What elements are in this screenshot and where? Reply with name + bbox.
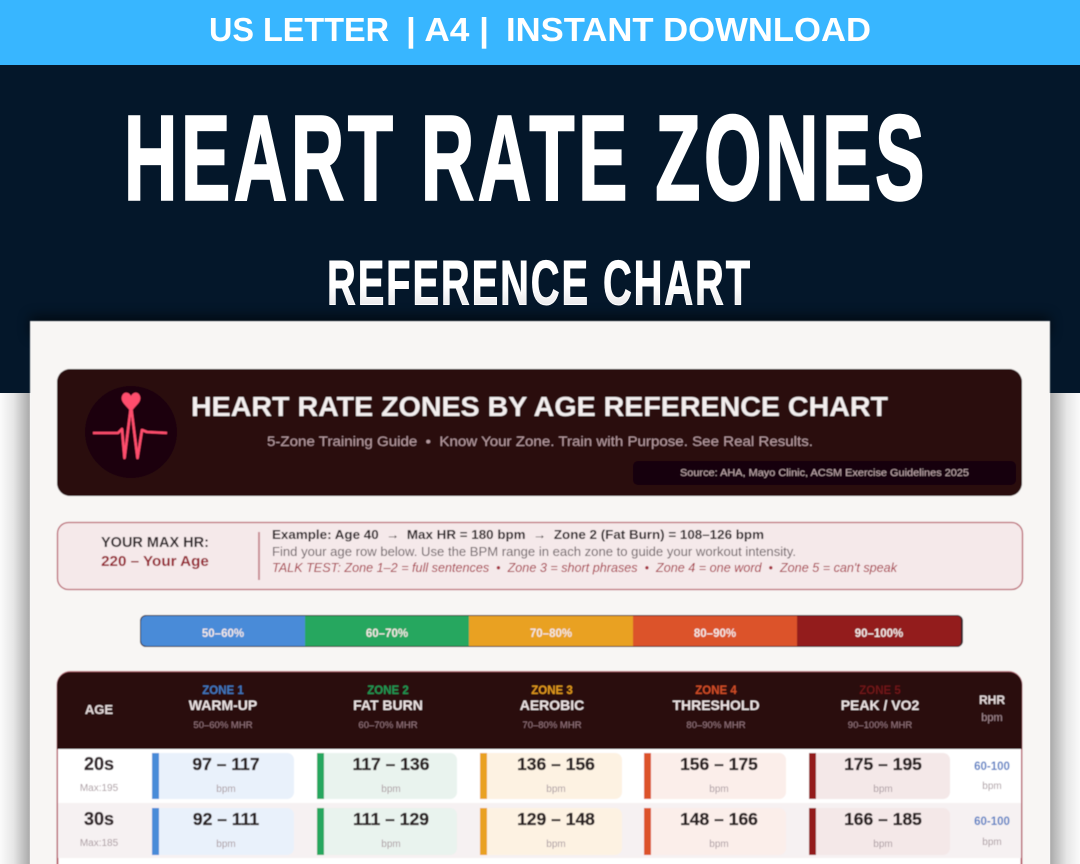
table row: 30s: 111 – 129 <box>353 809 429 829</box>
table row: 30s <box>58 803 1021 858</box>
table row: 20s <box>58 749 1021 803</box>
table row: 30s: 30s <box>84 809 114 829</box>
zone table <box>57 672 1022 864</box>
table row: 20s: Max:195 <box>80 783 119 794</box>
table row: 20s: bpm <box>546 784 566 795</box>
table header row: 50–60% MHR <box>193 720 253 731</box>
table row: 20s: bpm <box>381 784 401 795</box>
table row: 20s: 117 – 136 <box>353 754 430 774</box>
table row: 30s: bpm <box>216 839 236 850</box>
table header row: 90–100% MHR <box>848 720 912 731</box>
panel: max heart rate formula <box>58 522 1022 590</box>
table row: 20s: bpm <box>873 784 893 795</box>
zone intensity bar: 70–80% <box>530 628 572 640</box>
source pill: Source: AHA, Mayo Clinic, ACSM Exercise Guidelines 2025 <box>680 467 969 479</box>
table header row: AEROBIC <box>520 697 584 713</box>
table header row: ZONE 5 <box>859 685 901 697</box>
zone intensity bar <box>140 615 963 647</box>
icon: heart with ECG pulse <box>85 386 177 478</box>
table row: 30s: 129 – 148 <box>517 809 595 829</box>
document card <box>30 321 1050 864</box>
table row: 30s: 148 – 166 <box>680 809 758 829</box>
formula explanation: Find your age row below. Use the BPM range in each zone to guide your workout intensity. <box>272 545 796 559</box>
table header row: WARM-UP <box>189 697 257 713</box>
table row: 30s: bpm <box>381 839 401 850</box>
table header row: FAT BURN <box>353 697 423 713</box>
table row: 20s: 136 – 156 <box>517 754 595 774</box>
table row: 20s: bpm <box>982 781 1002 792</box>
table header row: AGE <box>85 702 113 717</box>
table row: 20s: bpm <box>216 784 236 795</box>
table header row: bpm <box>981 712 1003 724</box>
chart tagline: 5-Zone Training Guide • Know Your Zone. Train with Purpose. See Real Results. <box>267 433 813 449</box>
table header row: 80–90% MHR <box>686 720 746 731</box>
table header row: 60–70% MHR <box>358 720 418 731</box>
table row: 20s: 20s <box>84 754 114 774</box>
table row: 30s: bpm <box>982 837 1002 848</box>
table row: 20s: bpm <box>709 784 729 795</box>
table header row: ZONE 4 <box>695 685 737 697</box>
table header row: ZONE 2 <box>367 685 409 697</box>
formula label: YOUR MAX HR: <box>101 535 209 551</box>
table row: 30s: bpm <box>546 839 566 850</box>
table row: 30s: Max:185 <box>80 838 119 849</box>
table row: 20s: 60-100 <box>974 761 1010 773</box>
formula explanation <box>272 528 898 575</box>
formula label: 220 – Your Age <box>101 553 209 570</box>
table row: 30s: 166 – 185 <box>844 809 922 829</box>
lower background with card shadow <box>0 316 1080 864</box>
top banner: US LETTER <box>209 11 389 48</box>
zone intensity bar: 60–70% <box>366 628 408 640</box>
zone intensity bar: 80–90% <box>694 628 736 640</box>
source pill <box>633 461 1016 485</box>
table header row: 70–80% MHR <box>522 720 582 731</box>
table header row: RHR <box>979 693 1005 707</box>
top banner <box>0 0 1080 65</box>
table header row: ZONE 1 <box>202 685 244 697</box>
dark hero background <box>0 65 1080 393</box>
table row: 20s: 97 – 117 <box>192 754 260 774</box>
table header row: THRESHOLD <box>672 697 760 713</box>
table header row: PEAK / VO2 <box>841 697 919 713</box>
table row: 30s: bpm <box>873 839 893 850</box>
table row: 20s: 175 – 195 <box>844 754 922 774</box>
table header row: ZONE 3 <box>531 685 573 697</box>
zone intensity bar: 90–100% <box>855 628 903 640</box>
top banner: | A4 | <box>406 11 489 48</box>
subtitle: REFERENCE CHART <box>327 248 752 318</box>
formula explanation: TALK TEST: Zone 1–2 = full sentences • Zone 3 = short phrases • Zone 4 = one word • Zone 5 = can't speak <box>272 561 898 575</box>
chart heading: HEART RATE ZONES BY AGE REFERENCE CHART <box>191 391 888 422</box>
formula label <box>101 535 209 570</box>
formula explanation: Example: Age 40 → Max HR = 180 bpm → Zone 2 (Fat Burn) = 108–126 bpm <box>272 528 764 542</box>
table row: 30s: 60-100 <box>974 816 1010 828</box>
zone intensity bar: 50–60% <box>202 628 244 640</box>
table row: 30s: 92 – 111 <box>193 809 259 829</box>
table row: 30s: bpm <box>709 839 729 850</box>
table row: 20s: 156 – 175 <box>680 754 758 774</box>
panel: chart header <box>57 369 1022 496</box>
top banner: INSTANT DOWNLOAD <box>506 11 871 48</box>
table header row <box>57 672 1022 749</box>
